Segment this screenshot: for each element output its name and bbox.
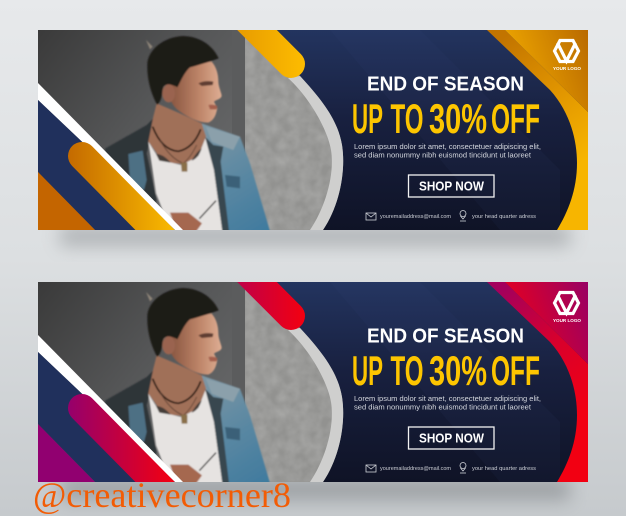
corner triangle highlight bbox=[505, 282, 588, 364]
discount headline: 30% bbox=[429, 347, 487, 394]
corner triangle bbox=[38, 424, 95, 482]
button: SHOP NOW bbox=[419, 178, 485, 194]
lower pill bbox=[82, 156, 165, 240]
photo backdrop bbox=[38, 30, 350, 230]
email: youremailaddress@mail.com bbox=[380, 214, 451, 220]
photo: man in denim jacket bbox=[105, 36, 271, 237]
panel: red banner bbox=[38, 282, 588, 482]
email: youremailaddress@mail.com bbox=[380, 466, 451, 472]
discount headline bbox=[352, 347, 540, 394]
navy panel bbox=[254, 282, 588, 482]
body text: sed diam nonummy nibh euismod tincidunt ut laoreet bbox=[354, 402, 532, 412]
discount headline: TO bbox=[390, 95, 424, 142]
logo label: YOUR LOGO bbox=[553, 66, 581, 72]
navy facets bbox=[330, 30, 560, 230]
top pill bbox=[237, 282, 305, 330]
navy stripe bbox=[38, 352, 175, 482]
panel: orange banner bbox=[38, 30, 588, 230]
discount headline: TO bbox=[390, 347, 424, 394]
banner shadow: bottom bbox=[60, 478, 570, 500]
button: SHOP NOW bbox=[419, 430, 485, 446]
address: your head quarter adress bbox=[472, 466, 536, 472]
logo label: YOUR LOGO bbox=[553, 318, 581, 324]
address: your head quarter adress bbox=[472, 214, 536, 220]
body text bbox=[354, 394, 541, 412]
watermark: @creativecorner8 bbox=[33, 475, 291, 515]
button bbox=[408, 175, 494, 197]
white stripe bbox=[38, 83, 183, 230]
icon: pin bbox=[460, 462, 466, 473]
corner triangle bbox=[38, 172, 95, 230]
photo: man in denim jacket bbox=[105, 288, 271, 489]
icon: envelope bbox=[366, 213, 376, 220]
body text: Lorem ipsum dolor sit amet, consectetuer adipiscing elit, bbox=[354, 394, 541, 403]
discount headline: OFF bbox=[491, 95, 540, 142]
discount headline: 30% bbox=[429, 95, 487, 142]
discount headline bbox=[352, 95, 540, 142]
button bbox=[408, 427, 494, 449]
photo backdrop bbox=[38, 282, 350, 482]
corner triangle highlight bbox=[505, 30, 588, 112]
grey ring bbox=[288, 76, 343, 230]
navy panel bbox=[254, 30, 588, 230]
body text bbox=[354, 142, 541, 160]
navy facets bbox=[330, 282, 560, 482]
discount headline: OFF bbox=[491, 347, 540, 394]
grey ring bbox=[288, 328, 343, 482]
navy stripe bbox=[38, 100, 175, 230]
icon: pin bbox=[460, 210, 466, 221]
discount headline: UP bbox=[352, 347, 383, 394]
body text: Lorem ipsum dolor sit amet, consectetuer adipiscing elit, bbox=[354, 142, 541, 151]
white stripe bbox=[38, 335, 183, 482]
icon: logo bbox=[554, 292, 578, 314]
lower pill bbox=[82, 408, 165, 492]
top pill bbox=[237, 30, 305, 78]
banner shadow: top bbox=[60, 226, 570, 246]
heading: END OF SEASON bbox=[367, 326, 524, 348]
icon: envelope bbox=[366, 465, 376, 472]
icon: logo bbox=[554, 40, 578, 62]
body text: sed diam nonummy nibh euismod tincidunt ut laoreet bbox=[354, 150, 532, 160]
heading: END OF SEASON bbox=[367, 74, 524, 96]
right corner bbox=[487, 30, 588, 230]
right corner bbox=[487, 282, 588, 482]
discount headline: UP bbox=[352, 95, 383, 142]
